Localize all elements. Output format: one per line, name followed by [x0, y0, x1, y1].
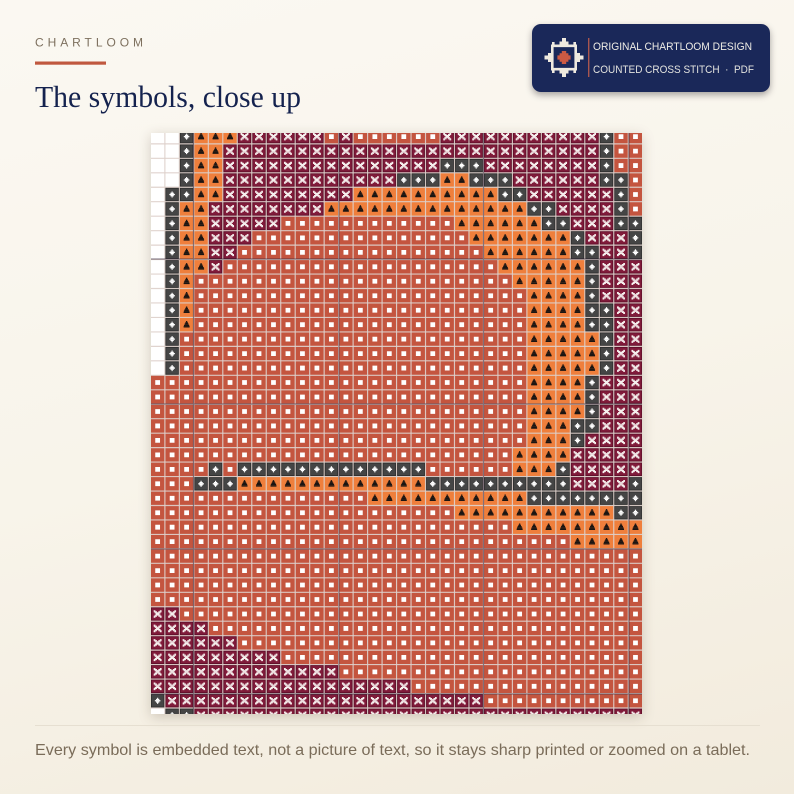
terracotta stitches with square symbols: [150, 129, 643, 722]
accent rule: [35, 62, 106, 65]
badge line two: COUNTED CROSS STITCH · PDF: [593, 64, 754, 76]
badge background: [532, 24, 770, 92]
badge content: [544, 38, 754, 77]
title: The symbols, close up: [35, 79, 301, 114]
footer note: Every symbol is embedded text, not a picture of text, so it stays sharp printed or zoomed on a tablet.: [35, 742, 750, 759]
footer divider: [35, 725, 760, 726]
badge line one: ORIGINAL CHARTLOOM DESIGN: [593, 41, 752, 53]
empty cells: [150, 129, 179, 722]
orange stitches with triangle symbols: [179, 129, 643, 549]
maroon stitches with cross symbols: [150, 129, 643, 722]
ten-stitch grid lines: [151, 133, 642, 714]
dark stitches with diamond symbols: [150, 129, 643, 722]
chart: cross stitch grid: [150, 129, 644, 724]
badge divider: [588, 38, 589, 77]
fine cell gaps: [150, 129, 644, 724]
eyebrow label: CHARTLOOM: [35, 36, 143, 50]
icon: cross stitch emblem: [544, 38, 584, 77]
grid shadow: [151, 133, 642, 714]
